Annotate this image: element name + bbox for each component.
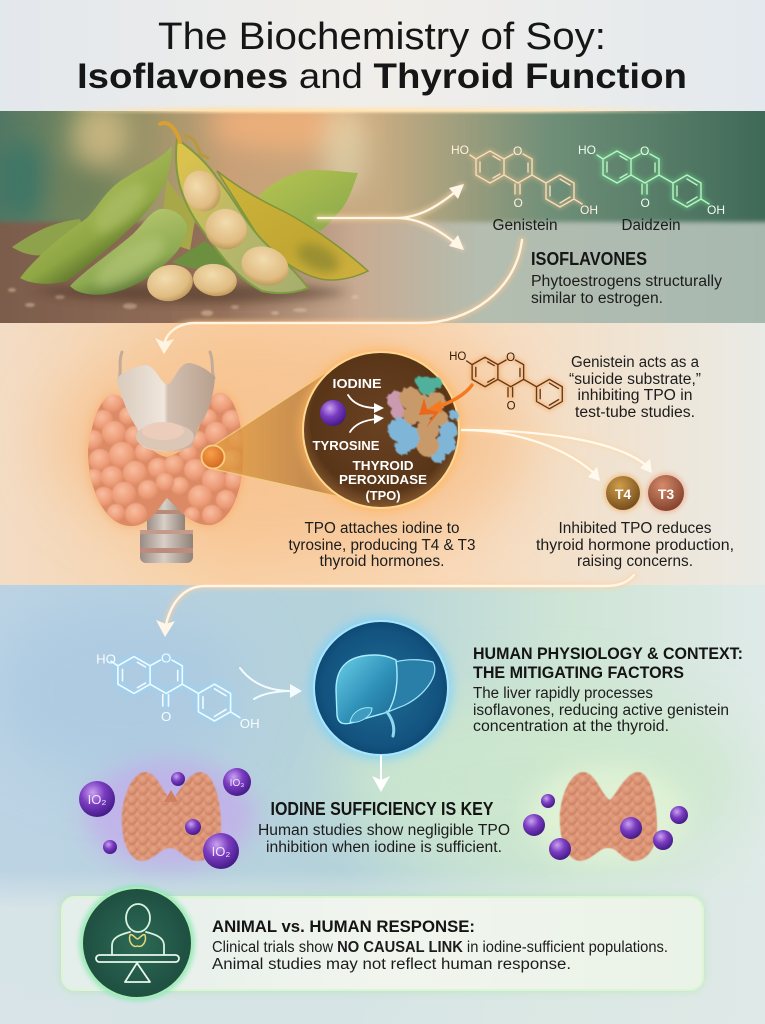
arrow: liver to iodine bbox=[372, 756, 390, 792]
icon: T4 hormone bbox=[604, 474, 642, 512]
text: suicide substrate: “suicide substrate,” bbox=[569, 371, 701, 388]
TPO labels: PEROXIDASE bbox=[339, 472, 427, 487]
molecule: genistein blue: HO bbox=[96, 651, 116, 666]
text: suicide substrate: inhibiting TPO in bbox=[578, 387, 692, 404]
text: iodine sufficiency: inhibition when iodine is sufficient. bbox=[266, 839, 502, 856]
arrow: soy to molecules bbox=[318, 184, 464, 250]
panel: human physiology background bbox=[0, 585, 765, 1024]
icon: soybean pods bbox=[12, 123, 368, 305]
molecule: daidzein: O bbox=[640, 144, 649, 158]
molecule: genistein bbox=[451, 143, 598, 217]
protein structure bbox=[387, 376, 459, 463]
arrow: molecule to liver bbox=[240, 668, 302, 699]
label: Daidzein: Daidzein bbox=[622, 217, 680, 234]
molecule: genistein: O bbox=[514, 196, 523, 210]
arrow: genistein inhibition bbox=[419, 385, 472, 428]
TPO labels: IODINE bbox=[332, 376, 382, 391]
text: inhibited TPO bbox=[536, 520, 734, 570]
text: human physiology: isoflavones, reducing active genistein bbox=[473, 702, 729, 719]
molecule: genistein inhibitor: O bbox=[507, 401, 516, 413]
title: Isoflavones and Thyroid Function bbox=[77, 57, 687, 96]
text: human physiology: The liver rapidly processes bbox=[473, 685, 653, 702]
glowing divider bbox=[60, 107, 700, 113]
molecule: genistein blue: O bbox=[161, 650, 171, 665]
text: TPO function: TPO attaches iodine to bbox=[304, 520, 460, 537]
icon: person on scale bbox=[79, 885, 195, 1001]
icon: thyroid gland bbox=[83, 352, 247, 563]
title bbox=[77, 16, 687, 96]
molecule: daidzein: OH bbox=[707, 203, 725, 217]
iodine spheres left: IO₃ bbox=[230, 778, 244, 789]
icon: T3 hormone bbox=[646, 473, 686, 513]
iodine spheres left bbox=[79, 768, 251, 869]
text: TPO function: thyroid hormones. bbox=[320, 553, 444, 570]
panel: animal vs human bbox=[62, 885, 703, 1001]
molecule: genistein: HO bbox=[451, 143, 469, 157]
icon: liver circle bbox=[309, 616, 453, 760]
icon: thyroid with iodine left bbox=[79, 760, 255, 870]
text: human physiology: HUMAN PHYSIOLOGY & CONTEXT: bbox=[473, 645, 743, 663]
text: TPO function bbox=[288, 520, 476, 570]
label: Genistein: Genistein bbox=[492, 217, 558, 234]
text: human physiology: concentration at the thyroid. bbox=[473, 718, 669, 735]
header background bbox=[0, 0, 765, 111]
iodine spheres left: IO₂ bbox=[212, 844, 230, 859]
text: animal vs human: ANIMAL vs. HUMAN RESPONSE: bbox=[212, 917, 475, 936]
molecule: daidzein: HO bbox=[578, 143, 596, 157]
text: iodine sufficiency: IODINE SUFFICIENCY IS KEY bbox=[270, 799, 494, 819]
panel: soy photo and isoflavones bbox=[0, 99, 765, 332]
text: inhibited TPO: Inhibited TPO reduces bbox=[558, 520, 712, 537]
molecule: daidzein bbox=[578, 143, 725, 217]
molecule: genistein: OH bbox=[580, 203, 598, 217]
TPO labels: TYROSINE bbox=[312, 438, 380, 453]
callout: zoom cone bbox=[213, 372, 340, 497]
TPO labels: (TPO) bbox=[366, 488, 400, 503]
text: iodine sufficiency bbox=[258, 799, 510, 856]
molecule: genistein inhibitor bbox=[449, 351, 562, 413]
text: animal vs human: Clinical trials show NO CAUSAL LINK in iodine-sufficient populations. bbox=[212, 939, 668, 956]
text: suicide substrate bbox=[569, 354, 701, 421]
molecule: genistein blue: OH bbox=[240, 716, 260, 731]
arrow: photo to thyroid bbox=[155, 240, 522, 354]
molecule: genistein: O bbox=[513, 144, 522, 158]
TPO labels bbox=[312, 376, 427, 503]
text: isoflavones bbox=[531, 249, 722, 307]
text: inhibited TPO: raising concerns. bbox=[577, 553, 693, 570]
text: inhibited TPO: thyroid hormone production, bbox=[536, 537, 734, 554]
text: iodine sufficiency: Human studies show negligible TPO bbox=[258, 822, 510, 839]
panel: TPO circle bbox=[299, 348, 472, 512]
iodine spheres left: IO₂ bbox=[88, 792, 106, 807]
text: animal vs human: Animal studies may not reflect human response. bbox=[212, 956, 571, 973]
text: human physiology: THE MITIGATING FACTORS bbox=[473, 664, 684, 682]
molecule: genistein inhibitor: HO bbox=[449, 351, 466, 363]
arrows: TPO to hormones bbox=[462, 430, 652, 481]
arrows: iodine and tyrosine bbox=[348, 395, 384, 432]
molecule: genistein inhibitor: O bbox=[506, 352, 515, 364]
iodine spheres right bbox=[523, 794, 688, 860]
icon: thyroid with iodine right bbox=[523, 765, 688, 865]
text: isoflavones: similar to estrogen. bbox=[531, 290, 663, 307]
icon: T3 hormone: T3 bbox=[658, 486, 674, 502]
table droplets bbox=[8, 288, 359, 316]
molecule: daidzein: O bbox=[640, 196, 650, 210]
thyroid lobes bbox=[88, 393, 243, 526]
title: The Biochemistry of Soy: bbox=[158, 16, 606, 58]
text: human physiology bbox=[473, 645, 743, 735]
text: TPO function: tyrosine, producing T4 & T3 bbox=[288, 537, 476, 554]
TPO labels: THYROID bbox=[352, 458, 414, 473]
icon: T4 hormone: T4 bbox=[615, 486, 631, 502]
molecule: genistein blue: O bbox=[161, 709, 171, 724]
molecule: genistein blue bbox=[96, 650, 260, 731]
icon: iodine sphere bbox=[320, 400, 346, 426]
text: isoflavones: Phytoestrogens structurally bbox=[531, 273, 722, 290]
text: suicide substrate: Genistein acts as a bbox=[571, 354, 699, 371]
text: animal vs human bbox=[212, 917, 668, 973]
zoom source marker bbox=[202, 446, 224, 468]
arrow: thyroid to physiology bbox=[156, 575, 634, 637]
panel: thyroid mechanism background bbox=[0, 320, 765, 585]
text: suicide substrate: test-tube studies. bbox=[575, 404, 695, 421]
text: isoflavones: ISOFLAVONES bbox=[531, 249, 647, 269]
